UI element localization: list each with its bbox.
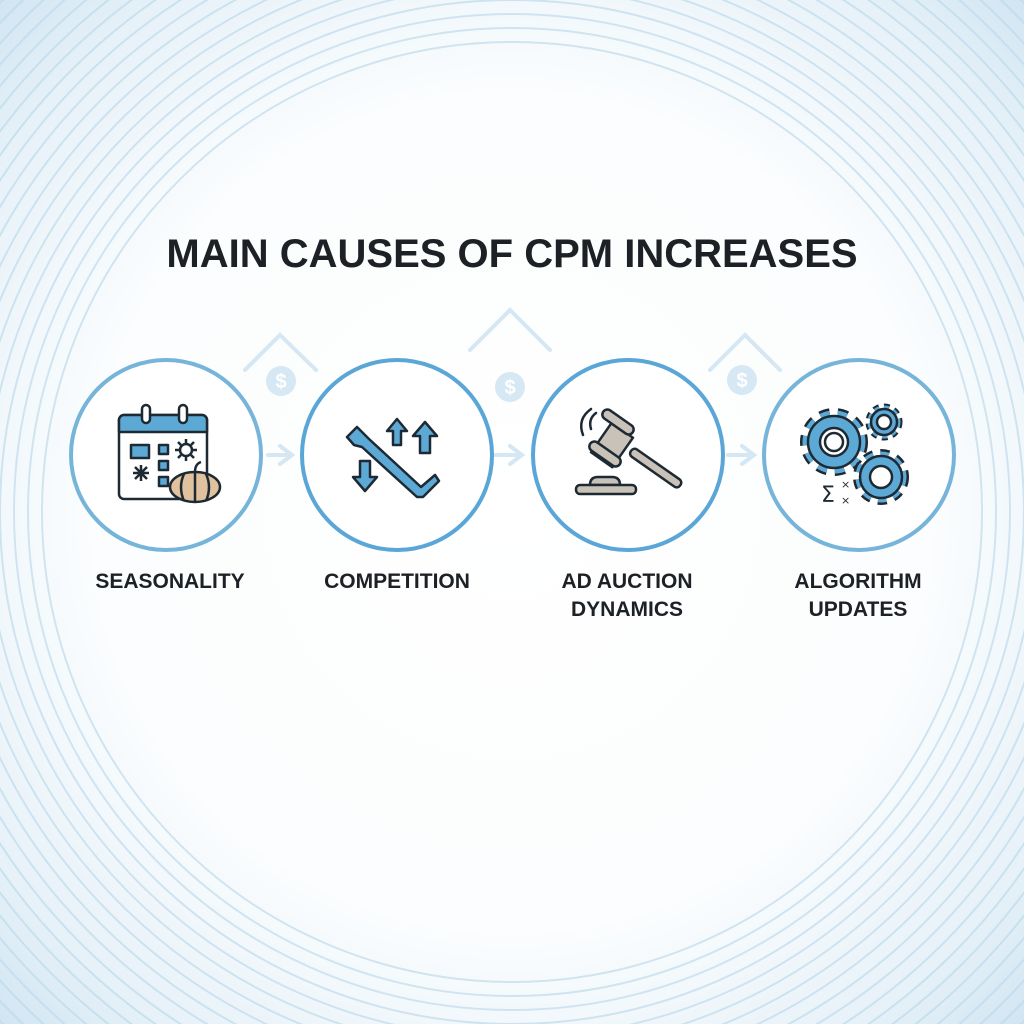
label: seasonality: SEASONALITY <box>95 570 245 593</box>
panel: ad auction <box>531 358 725 552</box>
label: ad auction dynamics: DYNAMICS <box>571 598 683 621</box>
icon: gavel <box>576 408 683 494</box>
label: ad auction dynamics <box>561 570 693 621</box>
panel: algorithm: Σ <box>821 483 835 508</box>
label: algorithm updates: UPDATES <box>809 598 907 621</box>
connectors: faint arrows and dollar houses: $ <box>504 377 516 399</box>
panel: algorithm <box>762 358 956 552</box>
connectors: faint arrows and dollar houses: $ <box>736 370 748 392</box>
panel: algorithm: × <box>841 478 850 491</box>
panel: seasonality <box>69 358 263 552</box>
panel: competition <box>300 358 494 552</box>
icon: calendar with pumpkin <box>119 405 220 502</box>
panel: algorithm: × <box>841 494 850 507</box>
label: algorithm updates <box>794 570 922 621</box>
icon: zigzag arrows <box>347 419 439 497</box>
label: competition: COMPETITION <box>324 570 470 593</box>
label: algorithm updates: ALGORITHM <box>794 570 922 593</box>
connectors: faint arrows and dollar houses: $ <box>275 371 287 393</box>
label: ad auction dynamics: AD AUCTION <box>561 570 693 593</box>
icon: gears <box>807 408 903 499</box>
title: MAIN CAUSES OF CPM INCREASES <box>166 232 858 276</box>
